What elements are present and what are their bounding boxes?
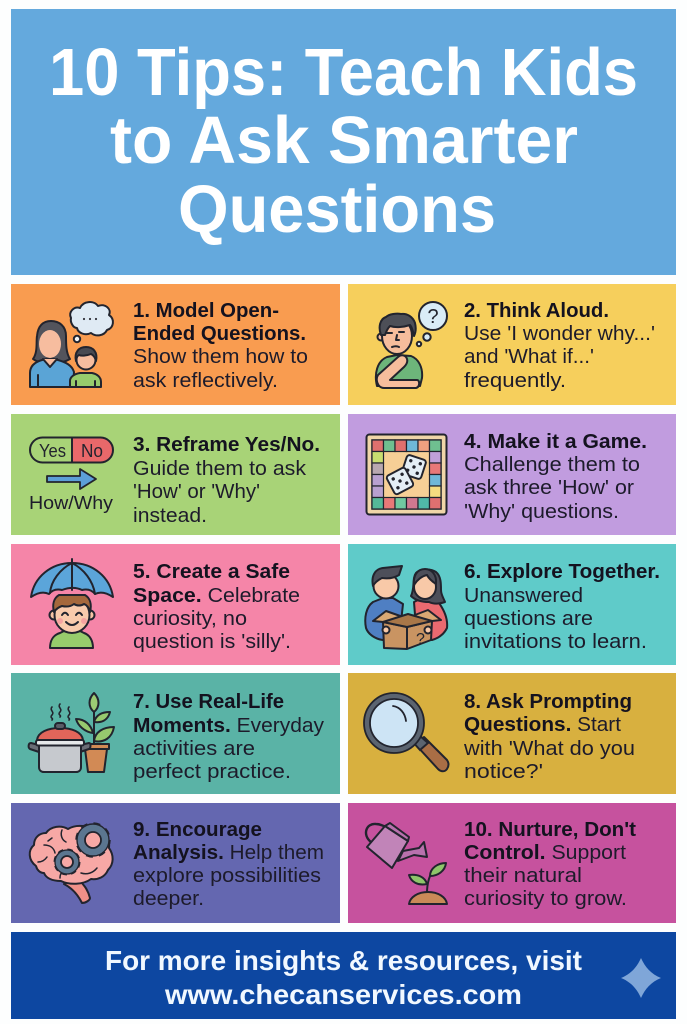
tip 6 text xyxy=(464,560,660,653)
tip 2 text: 2. Think Aloud. xyxy=(464,299,609,322)
panel: tip 3 xyxy=(11,414,340,535)
tip 9 text: explore possibilities xyxy=(133,864,321,887)
panel: tip 7 xyxy=(11,673,340,794)
tip 7 text: perfect practice. xyxy=(133,760,291,783)
icon: child under umbrella xyxy=(31,559,113,648)
tip 10 text: their natural xyxy=(464,864,582,887)
tip 1 text xyxy=(133,299,308,392)
footer banner xyxy=(11,932,676,1019)
panel: tip 9 xyxy=(11,803,340,923)
tip 3 text: instead. xyxy=(133,504,207,527)
panel: tip 1 xyxy=(11,284,340,405)
tip 2 text: Use 'I wonder why...' xyxy=(464,322,655,345)
tip 8 text: notice?' xyxy=(464,760,543,783)
icon: parent and child with thought bubble xyxy=(30,302,113,387)
panel: tip 2 xyxy=(348,284,676,405)
panel: tip 10 xyxy=(348,803,676,923)
tip 2 text xyxy=(464,299,655,392)
tip 10 text: Control. Support xyxy=(464,841,626,864)
tip 6 text: questions are xyxy=(464,607,593,630)
tip 4 text: 4. Make it a Game. xyxy=(464,430,647,453)
tip 10 text xyxy=(464,818,636,910)
tip 6 text: invitations to learn. xyxy=(464,630,647,653)
tip 5 text: question is 'silly'. xyxy=(133,630,291,653)
tip 2 text: frequently. xyxy=(464,369,566,392)
tip 4 text: Challenge them to xyxy=(464,453,640,476)
tip 2 text: and 'What if...' xyxy=(464,345,594,368)
tip 9 text: 9. Encourage xyxy=(133,818,262,841)
panel: tip 6 xyxy=(348,544,676,665)
icon: cooking pot and potted plant xyxy=(29,693,114,772)
title: Questions xyxy=(178,172,496,247)
tip 5 text: 5. Create a Safe xyxy=(133,560,290,583)
icon: sparkle xyxy=(621,958,661,998)
tip 10 text: 10. Nurture, Don't xyxy=(464,818,636,841)
footer text: For more insights & resources, visit xyxy=(105,945,582,976)
tip 3 text: 'How' or 'Why' xyxy=(133,480,260,503)
tip 6 text: 6. Explore Together. xyxy=(464,560,660,583)
tip 4 text: ask three 'How' or xyxy=(464,476,634,499)
icon: yes no toggle with arrow: How/Why xyxy=(29,493,113,513)
icon: yes no toggle with arrow: Yes xyxy=(39,441,66,461)
tip 7 text xyxy=(133,690,325,783)
tip 7 text: Moments. Everyday xyxy=(133,714,325,737)
tip 7 text: 7. Use Real-Life xyxy=(133,690,284,713)
tip 4 text: 'Why' questions. xyxy=(464,500,619,523)
tip 8 text: with 'What do you xyxy=(463,737,635,760)
footer text: www.checanservices.com xyxy=(164,979,522,1010)
tip 9 text xyxy=(133,818,324,910)
title: 10 Tips: Teach Kids xyxy=(49,35,638,110)
panel: tip 5 xyxy=(11,544,340,665)
tip 10 text: curiosity to grow. xyxy=(464,887,627,910)
icon: brain with gears xyxy=(30,824,113,903)
tip 6 text: Unanswered xyxy=(464,584,583,607)
tip 3 text: Guide them to ask xyxy=(133,457,307,480)
tip 5 text xyxy=(133,560,300,653)
icon: watering can and seedling xyxy=(366,823,447,904)
tip 1 text: Ended Questions. xyxy=(133,322,306,345)
title: to Ask Smarter xyxy=(110,103,578,178)
panel: tip 8 xyxy=(348,673,676,794)
tip 7 text: activities are xyxy=(133,737,255,760)
panel: tip 4 xyxy=(348,414,676,535)
tip 1 text: 1. Model Open- xyxy=(133,299,279,322)
tip 8 text xyxy=(463,690,635,783)
tip 5 text: Space. Celebrate xyxy=(133,584,300,607)
tip 9 text: Analysis. Help them xyxy=(133,841,324,864)
icon: thinking person xyxy=(376,302,447,388)
tip 5 text: curiosity, no xyxy=(133,607,247,630)
tip 1 text: Show them how to xyxy=(133,345,308,368)
tip 8 text: 8. Ask Prompting xyxy=(464,690,632,713)
title xyxy=(49,35,638,247)
icon: two people opening a box xyxy=(365,566,447,649)
footer text xyxy=(105,945,582,1010)
icon: yes no toggle with arrow: No xyxy=(81,441,103,461)
icon: magnifying glass xyxy=(364,693,448,771)
tip 3 text: 3. Reframe Yes/No. xyxy=(133,433,320,456)
icon: board game with dice xyxy=(366,434,446,514)
icon: two people opening a box: ? xyxy=(416,631,425,648)
icon: yes no toggle with arrow xyxy=(29,438,113,513)
tip 9 text: deeper. xyxy=(133,887,204,910)
tip 8 text: Questions. Start xyxy=(464,713,621,736)
tip 3 text xyxy=(133,433,320,527)
tip 1 text: ask reflectively. xyxy=(133,369,278,392)
tip 4 text xyxy=(464,430,647,523)
icon: thinking person: ? xyxy=(427,306,439,328)
header panel xyxy=(11,9,676,275)
